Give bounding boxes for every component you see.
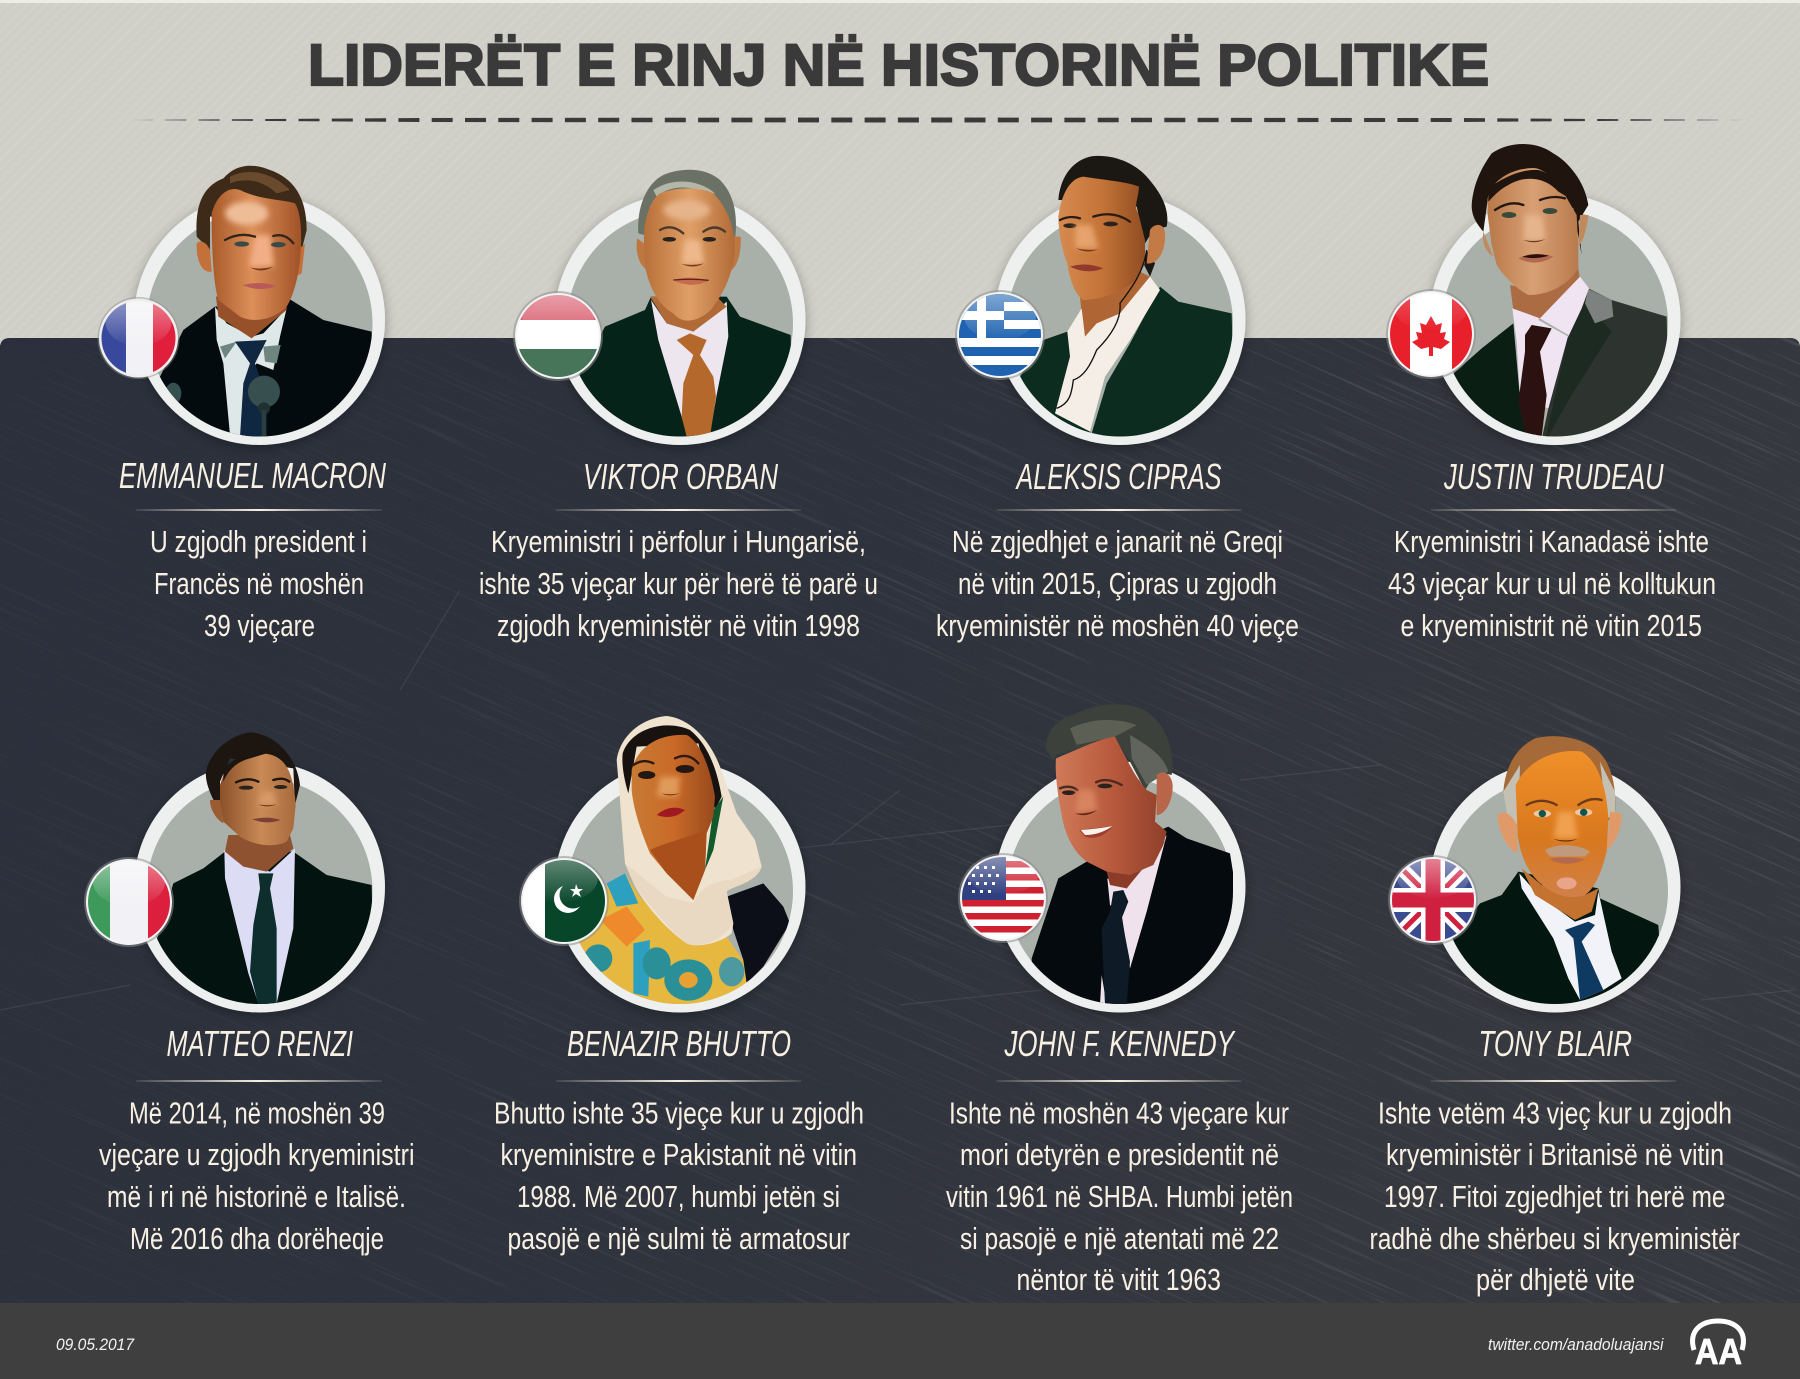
description bbox=[99, 1096, 414, 1256]
description: Më 2016 dha dorëheqje bbox=[130, 1221, 384, 1256]
divider bbox=[136, 509, 382, 511]
description: mori detyrën e presidentit në bbox=[960, 1137, 1279, 1172]
portrait: Macron bbox=[158, 166, 375, 450]
photo frame bbox=[134, 194, 385, 445]
name: Macron: EMMANUEL MACRON bbox=[119, 455, 387, 496]
description: Bhutto ishte 35 vjeçe kur u zgjodh bbox=[494, 1096, 864, 1130]
photo frame bbox=[1430, 194, 1680, 445]
portrait: Renzi bbox=[157, 732, 375, 1025]
name: Orban: VIKTOR ORBAN bbox=[583, 456, 779, 497]
name: Cipras: ALEKSIS CIPRAS bbox=[1015, 456, 1222, 497]
flag: Greece bbox=[955, 290, 1045, 380]
description: Ishte në moshën 43 vjeçare kur bbox=[949, 1096, 1289, 1130]
divider bbox=[136, 1080, 382, 1082]
logo: Anadolu Agency: AA bbox=[1695, 1331, 1742, 1372]
description: në vitin 2015, Çipras u zgjodh bbox=[958, 566, 1277, 601]
flag: France bbox=[98, 297, 180, 379]
divider bbox=[1431, 1080, 1676, 1082]
divider bbox=[1431, 509, 1676, 511]
name: Kennedy: JOHN F. KENNEDY bbox=[1004, 1023, 1236, 1064]
portrait: Orban bbox=[578, 170, 793, 450]
title: LIDERËT E RINJ NË HISTORINË POLITIKE bbox=[308, 33, 1489, 98]
description: kryeministër në moshën 40 vjeçe bbox=[936, 608, 1299, 643]
card: Tony Blair bbox=[1370, 736, 1740, 1297]
description: kryeministër i Britanisë në vitin bbox=[1386, 1137, 1724, 1172]
description bbox=[150, 524, 367, 643]
description: 43 vjeçar kur u ul në kolltukun bbox=[1388, 566, 1716, 601]
description: nëntor të vitit 1963 bbox=[1016, 1262, 1221, 1297]
description: Në zgjedhjet e janarit në Greqi bbox=[952, 524, 1283, 559]
divider bbox=[996, 509, 1242, 511]
footer date: 09.05.2017 bbox=[56, 1335, 134, 1354]
flag: United Kingdom bbox=[1388, 855, 1478, 945]
dashed divider bbox=[136, 118, 1741, 122]
description: si pasojë e një atentati më 22 bbox=[960, 1221, 1279, 1256]
flag: Italy bbox=[84, 857, 174, 947]
portrait: Kennedy bbox=[1032, 704, 1237, 1022]
card: John F. Kennedy bbox=[946, 704, 1293, 1297]
name: Renzi: MATTEO RENZI bbox=[166, 1023, 353, 1064]
panel: footer bar bbox=[0, 1303, 1800, 1379]
description: Francës në moshën bbox=[154, 566, 364, 601]
card: Benazir Bhutto bbox=[494, 716, 864, 1256]
photo frame bbox=[554, 194, 806, 445]
description: për dhjetë vite bbox=[1476, 1262, 1635, 1297]
description: ishte 35 vjeçar kur për herë të parë u bbox=[479, 566, 878, 601]
flag: Hungary bbox=[513, 291, 603, 381]
description bbox=[479, 524, 878, 643]
photo frame bbox=[134, 762, 385, 1012]
description: më i ri në historinë e Italisë. bbox=[107, 1179, 406, 1214]
description: pasojë e një sulmi të armatosur bbox=[508, 1221, 850, 1256]
flag: Pakistan bbox=[519, 854, 609, 946]
panel: light header background bbox=[0, 0, 1800, 345]
panel: dark chalkboard background bbox=[0, 338, 1800, 1303]
footer social handle: twitter.com/anadoluajansi bbox=[1488, 1335, 1665, 1354]
photo frame bbox=[554, 762, 806, 1012]
description bbox=[494, 1096, 864, 1256]
card: Aleksis Cipras bbox=[936, 156, 1299, 643]
divider bbox=[556, 1080, 801, 1082]
description: zgjodh kryeministër në vitin 1998 bbox=[497, 608, 860, 643]
description bbox=[1370, 1096, 1740, 1297]
portrait: Blair bbox=[1450, 736, 1665, 1025]
name: Blair: TONY BLAIR bbox=[1478, 1023, 1632, 1064]
card: Viktor Orban bbox=[479, 170, 878, 643]
card: Emmanuel Macron bbox=[98, 166, 387, 643]
photo frame bbox=[994, 194, 1246, 445]
description: Kryeministri i Kanadasë ishte bbox=[1394, 524, 1709, 559]
divider bbox=[996, 1080, 1242, 1082]
portrait: Bhutto bbox=[578, 716, 790, 1010]
photo frame bbox=[994, 762, 1246, 1012]
description: 39 vjeçare bbox=[204, 608, 315, 643]
description: Më 2014, në moshën 39 bbox=[129, 1096, 385, 1130]
photo frame bbox=[1430, 762, 1680, 1012]
flag: USA bbox=[958, 853, 1048, 943]
card: Matteo Renzi bbox=[84, 732, 414, 1256]
portrait: Trudeau bbox=[1452, 144, 1670, 455]
name: Trudeau: JUSTIN TRUDEAU bbox=[1443, 456, 1664, 497]
name: Bhutto: BENAZIR BHUTTO bbox=[567, 1023, 791, 1064]
description bbox=[946, 1096, 1293, 1297]
description: Kryeministri i përfolur i Hungarisë, bbox=[491, 524, 866, 559]
description: vitin 1961 në SHBA. Humbi jetën bbox=[946, 1179, 1293, 1214]
description: e kryeministrit në vitin 2015 bbox=[1400, 608, 1702, 643]
description bbox=[936, 524, 1299, 643]
description: vjeçare u zgjodh kryeministri bbox=[99, 1137, 414, 1172]
description: kryeministre e Pakistanit në vitin bbox=[500, 1137, 857, 1172]
description: U zgjodh president i bbox=[150, 524, 367, 559]
portrait: Cipras bbox=[1020, 156, 1235, 450]
card: Justin Trudeau bbox=[1386, 144, 1716, 643]
flag: Canada bbox=[1386, 289, 1476, 379]
description bbox=[1388, 524, 1716, 643]
divider bbox=[556, 509, 801, 511]
description: 1988. Më 2007, humbi jetën si bbox=[517, 1179, 840, 1214]
